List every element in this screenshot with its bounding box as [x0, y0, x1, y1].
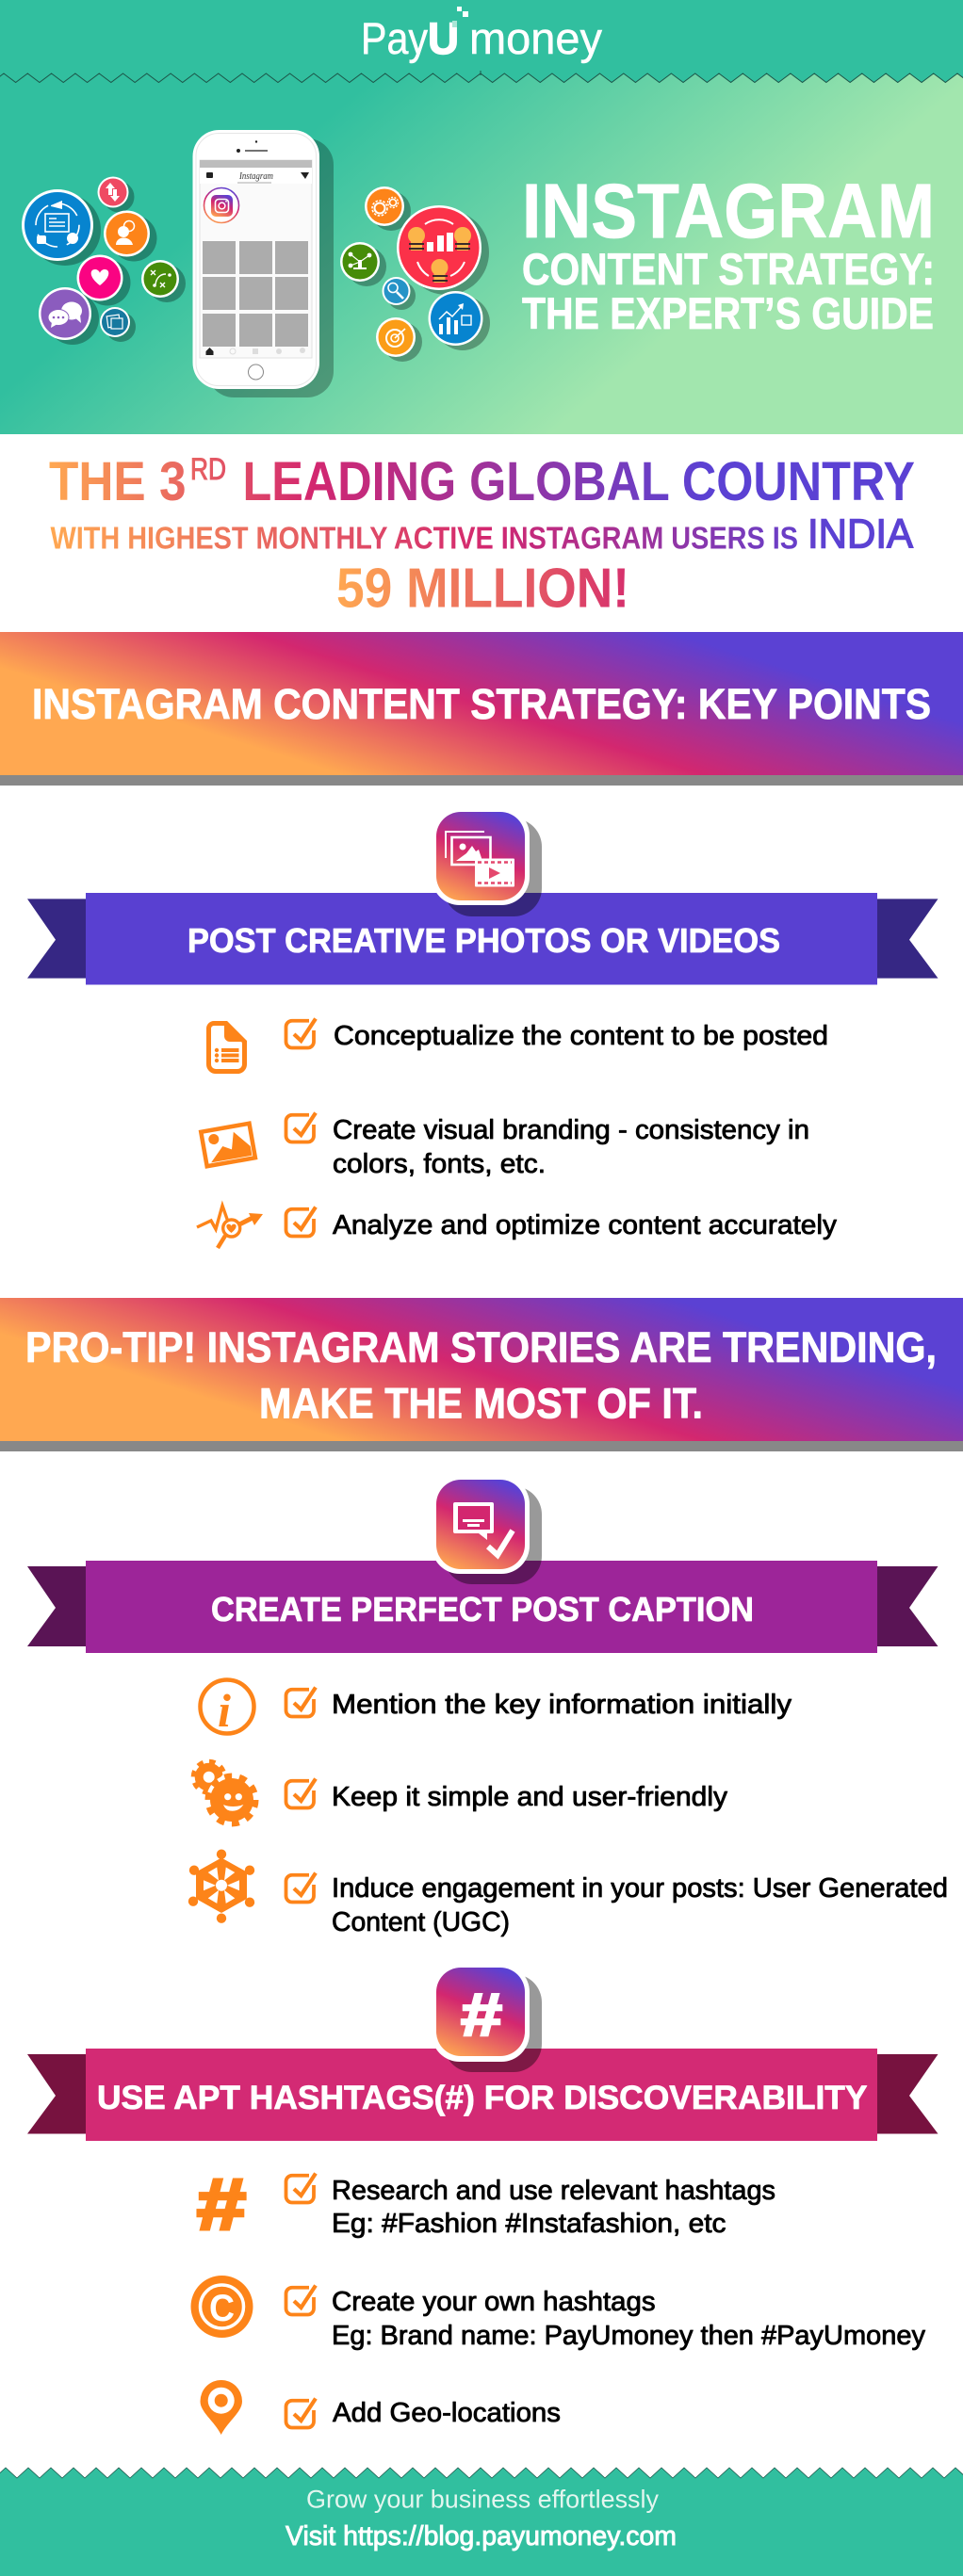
item text: Induce engagement in your posts: User Generated: [332, 1873, 948, 1904]
icon: hash: #: [197, 2164, 246, 2245]
footer link: Visit https://blog.payumoney.com: [286, 2521, 677, 2552]
item text: Mention the key information initially: [332, 1690, 792, 1720]
item text: colors, fonts, etc.: [333, 1149, 546, 1179]
item text: Content (UGC): [332, 1907, 510, 1937]
stat headline: RD: [190, 452, 226, 486]
header band with logo: [0, 0, 963, 83]
circle: chart: [428, 291, 490, 350]
section 2 checklist: [188, 1680, 948, 1937]
stat headline: WITH HIGHEST MONTHLY ACTIVE INSTAGRAM USERS IS: [51, 520, 798, 556]
logo: PayUmoney: money: [469, 13, 602, 63]
left social circles: [22, 177, 186, 345]
icon: hashtag badge: [432, 1964, 542, 2072]
icon: caption badge: [432, 1476, 542, 1584]
icon: smiling gears: [193, 1761, 257, 1825]
item text: Add Geo-locations: [333, 2398, 561, 2428]
icon: hashtag badge: #: [461, 1981, 502, 2049]
circle: chat: [39, 287, 99, 345]
hero panel: [0, 0, 963, 434]
section 3 checklist: [190, 2164, 925, 2435]
circle: strategy: [141, 260, 186, 302]
item text: Create visual branding - consistency in: [333, 1115, 809, 1145]
instagram logo: [204, 188, 239, 222]
circle: network: [340, 242, 386, 286]
circle: arrows: [98, 177, 134, 213]
stat headline: INDIA: [808, 511, 914, 558]
right strategy circles: [340, 186, 490, 362]
item text: Keep it simple and user-friendly: [332, 1782, 728, 1812]
item text: Conceptualize the content to be posted: [334, 1021, 828, 1051]
circle: people: [104, 211, 156, 262]
checkbox: [286, 1019, 316, 1047]
section 2 ribbon: create perfect post caption: CREATE PERFECT POST CAPTION: [211, 1590, 754, 1628]
icon: information: [200, 1680, 254, 1737]
circle: ideas and growth: [397, 205, 489, 295]
checkbox: [286, 1207, 316, 1236]
footer tagline: Grow your business effortlessly: [306, 2486, 659, 2514]
phone mockup: [192, 130, 334, 397]
circle: photos: [100, 307, 136, 342]
stat headline: [49, 451, 915, 620]
section 1 ribbon: post creative photos or videos: POST CREATIVE PHOTOS OR VIDEOS: [188, 921, 780, 960]
footer band: [0, 2468, 963, 2576]
logo: PayUmoney: Pay: [361, 13, 428, 63]
item text: Eg: Brand name: PayUmoney then #PayUmoney: [332, 2321, 925, 2351]
stat headline: 59 MILLION!: [336, 558, 629, 620]
section 2 ribbon: create perfect post caption: [27, 1561, 939, 1653]
section 1 checklist: [197, 1019, 838, 1248]
stat headline: THE 3: [49, 451, 187, 512]
item text: Eg: #Fashion #Instafashion, etc: [332, 2209, 726, 2239]
icon: analyze: [197, 1206, 263, 1248]
logo: PayUmoney: [361, 7, 602, 63]
banner: pro-tip: [0, 1298, 963, 1451]
item text: Research and use relevant hashtags: [332, 2176, 775, 2206]
section 1 ribbon: post creative photos or videos: [27, 893, 939, 985]
checkbox: [286, 1113, 316, 1142]
phone mockup: Instagram: [238, 170, 273, 182]
section 3 ribbon: use apt hashtags: USE APT HASHTAGS(#) FOR DISCOVERABILITY: [97, 2080, 867, 2116]
checkbox: [286, 2285, 316, 2315]
checkbox: [286, 1778, 316, 1808]
icon: location pin: [200, 2380, 242, 2435]
logo: PayUmoney: U: [428, 13, 459, 63]
item text: Analyze and optimize content accurately: [333, 1210, 838, 1240]
icon: image: [201, 1124, 255, 1166]
banner: key points: [0, 632, 963, 786]
item text: Create your own hashtags: [332, 2287, 656, 2317]
icon: community wheel: [188, 1850, 254, 1923]
checkbox: [286, 2174, 316, 2202]
icon: document: [209, 1023, 245, 1072]
hero title: [522, 169, 935, 339]
checkbox: [286, 1872, 316, 1903]
circle: magnifier: [383, 277, 416, 310]
icon: photo and video badge: [432, 807, 542, 916]
photo grid: [203, 241, 308, 347]
circle: gears: [365, 186, 411, 231]
circle: heart: [77, 254, 130, 305]
section 3 ribbon: use apt hashtags: [27, 2049, 939, 2141]
circle: target: [376, 317, 422, 362]
checkbox: [286, 1688, 316, 1716]
banner: pro-tip: MAKE THE MOST OF IT.: [259, 1379, 703, 1428]
checkbox: [286, 2398, 316, 2428]
icon: information: i: [218, 1684, 231, 1737]
icon: copyright: C: [209, 2288, 235, 2329]
icon: copyright: [190, 2276, 253, 2338]
circle: content cycle: [22, 189, 101, 266]
